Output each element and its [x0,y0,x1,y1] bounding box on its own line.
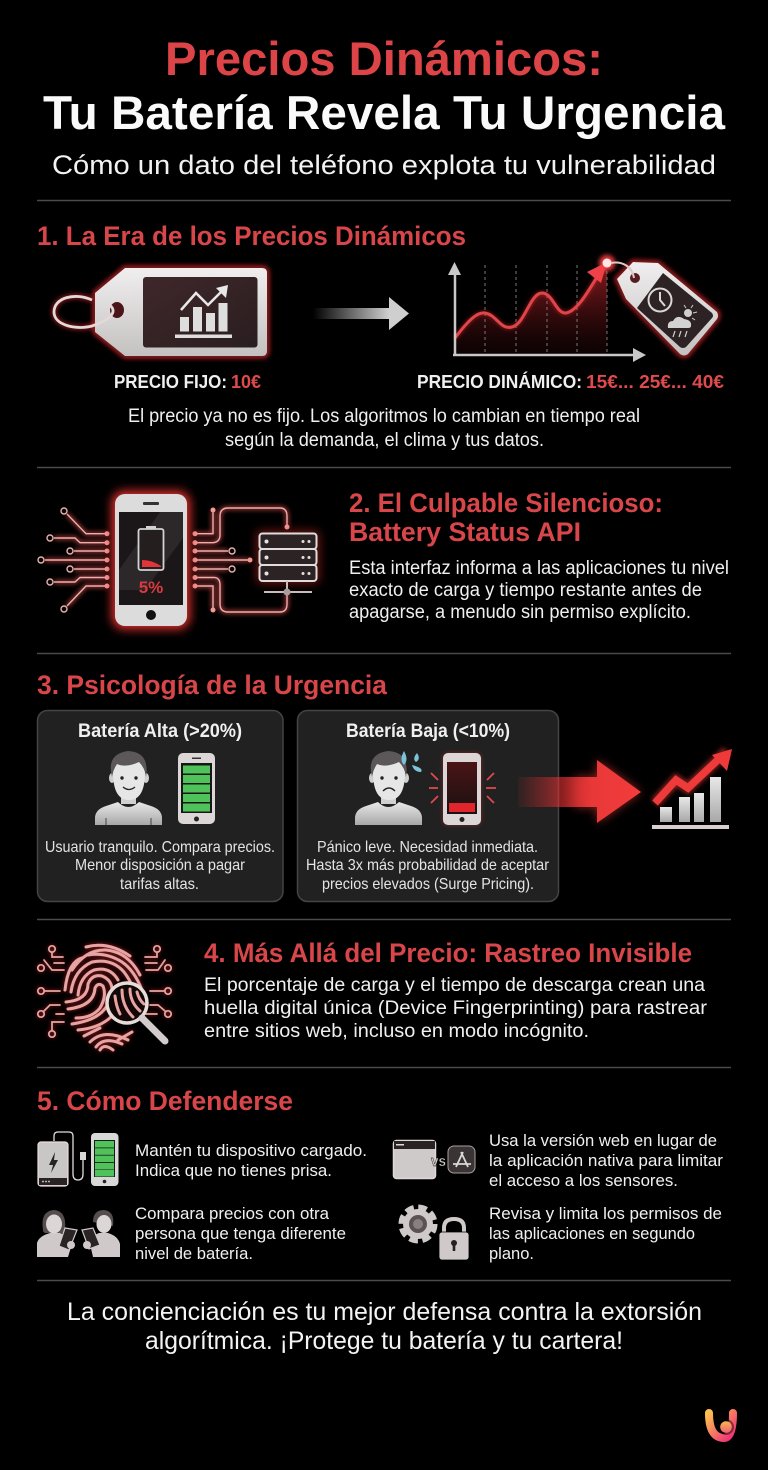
text: section 1 body [128,406,640,451]
text: keep charged: Mantén tu dispositivo cargado. [135,1141,367,1160]
closing statement: algorítmica. ¡Protege tu batería y tu cartera! [145,1327,623,1355]
panel: high battery [38,710,283,902]
title: Tu Batería Revela Tu Urgencia [43,86,726,139]
text: section 4 body: El porcentaje de carga y el tiempo de descarga crean una [204,975,705,996]
text: limit permissions [489,1204,722,1263]
closing statement: La concienciación es tu mejor defensa contra la extorsión [67,1298,702,1326]
title [43,32,726,139]
icon: web versus app: vs [431,1153,446,1170]
text: low battery description [306,839,550,893]
text: use web version: el acceso a los sensores. [489,1171,678,1190]
text: low battery description: Pánico leve. Necesidad inmediata. [317,839,538,856]
icon: worried user [355,751,422,825]
arrow: fixed to dynamic [313,297,409,330]
panel title: high battery: Batería Alta (>20%) [78,721,242,742]
label: fixed price: 10€ [231,372,261,392]
text: section 2 body: exacto de carga y tiempo restante antes de [349,580,702,601]
arrow: urgency to higher price [518,760,641,823]
text: low battery description: precios elevados (Surge Pricing). [322,876,534,893]
text: high battery description: tarifas altas. [120,876,199,893]
text: limit permissions: Revisa y limita los permisos de [489,1204,722,1223]
closing statement [67,1298,702,1355]
text: section 4 body [204,975,708,1042]
text: compare prices: Compara precios con otra [135,1204,330,1223]
text: section 4 body: entre sitios web, incluso en modo incógnito. [204,1021,589,1042]
text: high battery description: Menor disposición a pagar [75,857,246,874]
text: section 1 body: El precio ya no es fijo. Los algoritmos lo cambian en tiempo real [128,406,640,427]
icon: logo [709,1413,734,1438]
section 2 heading: 2. El Culpable Silencioso: [349,488,663,518]
text: high battery description [45,839,275,893]
panel: low battery [298,710,558,902]
icon: gear and lock [402,1208,469,1260]
icon: low battery phone [429,753,496,825]
text: compare prices: nivel de batería. [135,1244,253,1263]
icon: phone with circuits and server: 5% [139,578,163,597]
text: keep charged [135,1141,367,1180]
text: section 1 body: según la demanda, el clima y tus datos. [225,430,544,451]
text: section 2 body: apagarse, a menudo sin permiso explícito. [349,602,691,623]
text: section 2 body [349,558,729,623]
icon: charged phone [178,753,215,824]
label: dynamic price: PRECIO DINÁMICO: [417,371,582,392]
text: use web version: la aplicación nativa para limitar [489,1151,723,1170]
icon: two people comparing [37,1210,120,1257]
icon: rising price chart [652,749,732,829]
icon: calm user [95,751,162,825]
text: use web version [489,1131,723,1190]
section 1 heading: 1. La Era de los Precios Dinámicos [37,221,466,251]
text: limit permissions: plano. [489,1244,534,1263]
text: compare prices [135,1204,346,1263]
icon: phone with circuits and server [38,491,319,629]
text: limit permissions: las aplicaciones en segundo [489,1224,695,1243]
section 2 heading: Battery Status API [349,517,581,547]
label: fixed price: PRECIO FIJO: [114,372,227,392]
text: keep charged: Indica que no tienes prisa. [135,1161,332,1180]
text: high battery description: Usuario tranquilo. Compara precios. [45,839,275,856]
icon: power bank and phone [38,1132,118,1186]
text: section 4 body: huella digital única (Device Fingerprinting) para rastrear [204,998,708,1019]
icon: fixed price tag [54,268,267,356]
icon: dynamic price tag [611,262,718,356]
section 2 heading [349,488,663,547]
icon: web versus app [394,1140,475,1178]
label: dynamic price: 15€... 25€... 40€ [586,372,724,392]
text: compare prices: persona que tenga diferente [135,1224,346,1243]
title: Precios Dinámicos: [165,32,603,85]
label: dynamic price [417,371,724,392]
subtitle: Cómo un dato del teléfono explota tu vulnerabilidad [52,150,716,180]
text: low battery description: Hasta 3x más probabilidad de aceptar [306,857,550,874]
section 4 heading: 4. Más Allá del Precio: Rastreo Invisible [204,938,692,968]
text: use web version: Usa la versión web en lugar de [489,1131,717,1150]
chart: dynamic price curve [448,255,646,362]
section 5 heading: 5. Cómo Defenderse [37,1086,293,1116]
text: section 2 body: Esta interfaz informa a las aplicaciones tu nivel [349,558,729,579]
icon: fingerprint with magnifier [38,945,171,1050]
panel title: low battery: Batería Baja (<10%) [346,721,510,742]
section 3 heading: 3. Psicología de la Urgencia [37,670,388,700]
